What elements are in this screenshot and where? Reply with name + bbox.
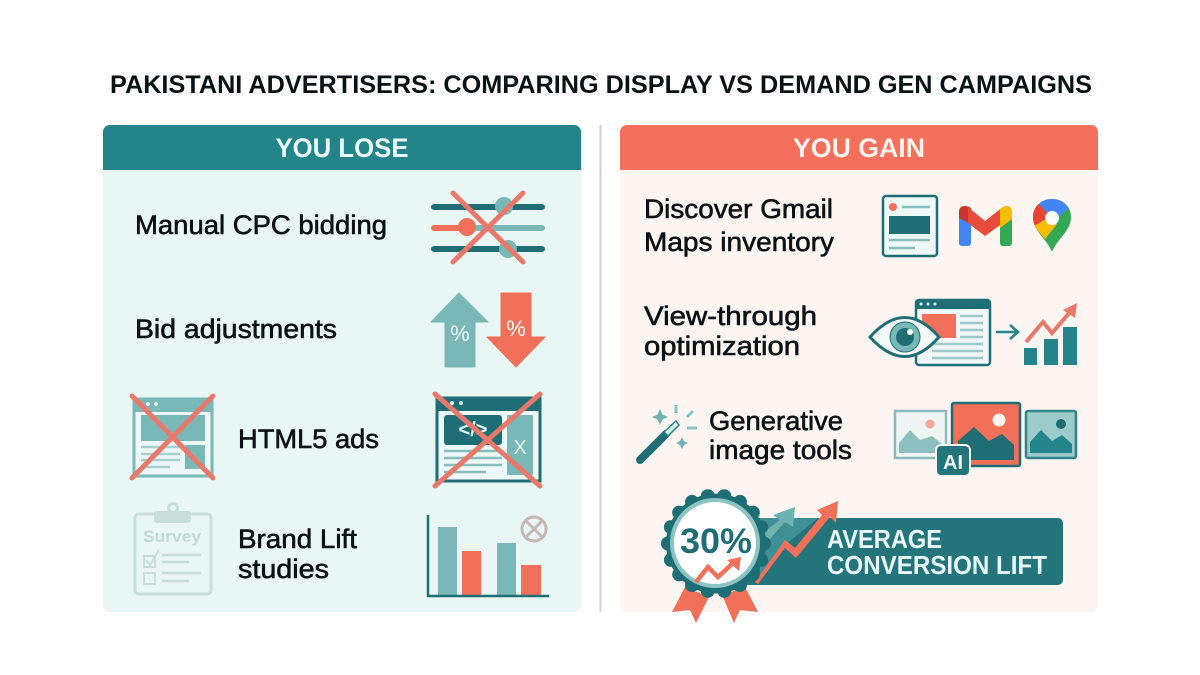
callout: average conversion lift <box>661 489 1063 623</box>
icon: percent arrows <box>431 293 545 367</box>
icon: faded survey clipboard: Survey <box>143 527 202 546</box>
icon: crossed-out display ad <box>132 396 213 478</box>
text: generative image tools: image tools <box>709 435 852 465</box>
header: you lose <box>103 125 581 170</box>
icon: percent arrows: % <box>450 321 470 346</box>
icon: ai image tiles <box>895 403 1076 476</box>
icon: faded survey clipboard <box>135 504 211 594</box>
text: view-through optimization: View-through <box>644 301 817 331</box>
badge: 30% <box>680 522 752 561</box>
icon: gmail <box>959 206 1012 246</box>
banner text: CONVERSION LIFT <box>827 552 1047 580</box>
badge <box>661 489 771 598</box>
icon: magic wand <box>640 405 697 460</box>
icon: maps pin <box>1033 199 1071 252</box>
text: view-through optimization: optimization <box>644 331 800 361</box>
title: PAKISTANI ADVERTISERS: COMPARING DISPLAY VS DEMAND GEN CAMPAIGNS <box>110 71 1092 99</box>
icon: discover feed card <box>883 196 937 256</box>
icon: percent arrows: % <box>506 316 526 341</box>
header: you gain <box>620 125 1098 170</box>
panel: you gain <box>620 125 1098 623</box>
teal growth arrow <box>764 507 795 541</box>
icon: eye on browser to growth chart <box>870 299 1077 365</box>
icon: crossed-out html5 browser: </> <box>459 419 487 441</box>
text: discover gmail maps inventory: Discover Gmail <box>644 194 833 224</box>
icon: crossed-out html5 browser: X <box>513 437 527 459</box>
text: brand lift studies <box>238 524 358 584</box>
panel: you lose <box>103 125 581 612</box>
divider <box>600 125 602 612</box>
text: brand lift studies: studies <box>238 554 329 584</box>
text: bid adjustments: Bid adjustments <box>135 314 337 344</box>
text: manual cpc bidding: Manual CPC bidding <box>135 210 387 240</box>
text: brand lift studies: Brand Lift <box>238 524 358 554</box>
icon: ai image tiles: AI <box>943 452 963 474</box>
text: html5 ads: HTML5 ads <box>238 424 379 454</box>
chart: bars with blocked symbol <box>428 515 549 596</box>
text: view-through optimization <box>644 301 817 361</box>
banner text: AVERAGE <box>827 526 942 554</box>
text: generative image tools <box>709 406 852 465</box>
banner text <box>827 526 1047 580</box>
icon: crossed-out sliders <box>434 193 542 262</box>
coral growth arrow <box>755 501 838 584</box>
banner <box>740 518 1063 585</box>
header: you lose: YOU LOSE <box>276 133 408 163</box>
ribbons <box>672 587 758 623</box>
icon: crossed-out html5 browser <box>435 394 541 486</box>
text: discover gmail maps inventory <box>644 194 835 257</box>
text: discover gmail maps inventory: Maps inventory <box>644 227 835 257</box>
text: generative image tools: Generative <box>709 406 843 436</box>
header: you gain: YOU GAIN <box>793 133 925 163</box>
banner highlight <box>760 518 818 575</box>
